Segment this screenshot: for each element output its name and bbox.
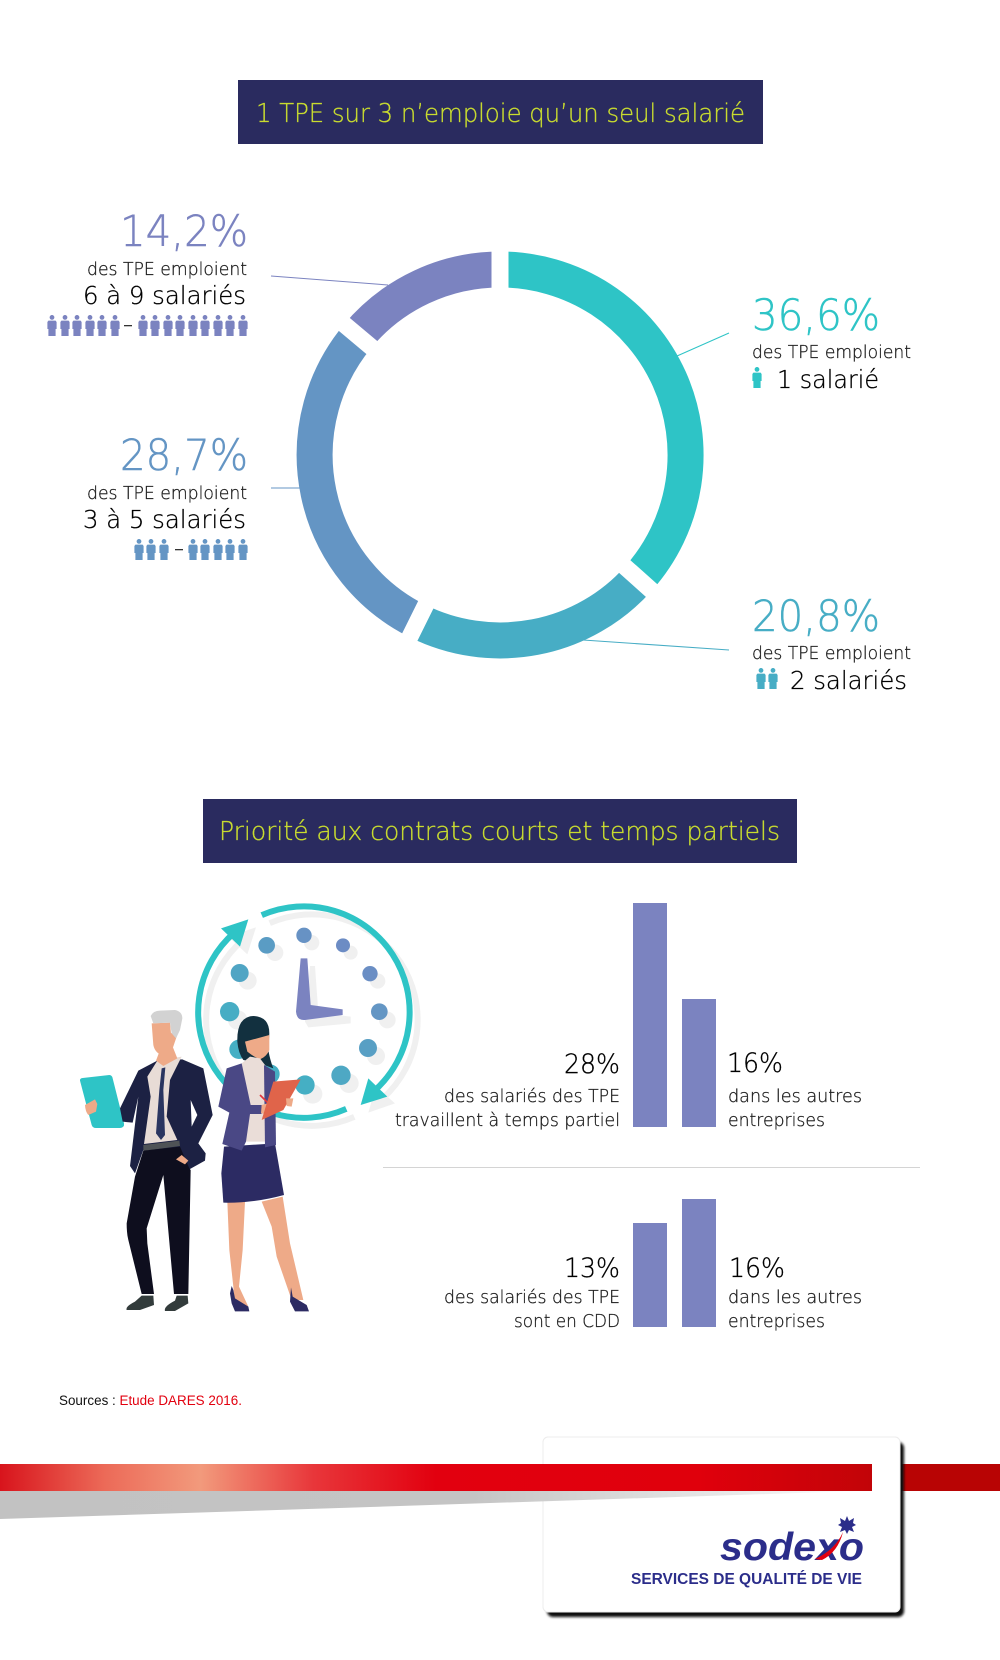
footer band and card (0, 1437, 1000, 1617)
heading: contrats courts (203, 799, 797, 863)
icon: people 6 to 9 (47, 315, 248, 336)
text: CDD autres: 16% (729, 1253, 785, 1284)
text: temps partiel TPE (395, 1049, 620, 1131)
heading: 1 TPE sur 3: 1 TPE sur 3 n’emploie qu’un seul salarié (256, 99, 745, 129)
label: 14,2%: 6 à 9 salariés (83, 281, 246, 310)
clock ring with arrows (198, 906, 410, 1118)
text: temps partiel autres (727, 1048, 862, 1131)
text: temps partiel autres: 16% (727, 1048, 783, 1079)
heading: 1 TPE sur 3 (238, 80, 763, 144)
man (80, 1010, 213, 1311)
clock hands (296, 958, 343, 1020)
bar chart: CDD (633, 1199, 716, 1327)
label: 28,7%: 3 à 5 salariés (83, 505, 246, 534)
donut chart (314, 235, 686, 675)
bar chart: temps partiel (633, 903, 716, 1127)
label: 28,7% (83, 431, 248, 560)
icon: two people (756, 668, 778, 689)
label: 14,2%: des TPE emploient (87, 259, 247, 280)
label: 14,2% (47, 207, 248, 336)
text: CDD TPE: des salariés des TPE (444, 1287, 620, 1308)
icon: people 3 to 5 (134, 539, 248, 560)
label: 28,7%: des TPE emploient (87, 483, 247, 504)
label: 20,8%: 2 salariés (790, 666, 907, 695)
text: temps partiel TPE: travaillent à temps partiel (395, 1110, 620, 1131)
clock dots (220, 928, 388, 1095)
icon: one person (752, 367, 762, 388)
text: CDD autres (728, 1253, 862, 1332)
heading: contrats courts: Priorité aux contrats courts et temps partiels (219, 817, 780, 847)
text: temps partiel TPE: 28% (564, 1049, 620, 1080)
logo: sodexo: sodexo (720, 1526, 864, 1569)
label: 36,6%: 1 salarié (777, 365, 879, 394)
logo: sodexo (631, 1516, 864, 1588)
text: temps partiel autres: dans les autres (728, 1086, 862, 1107)
illustration: clock and two people (80, 906, 418, 1311)
label: 20,8% (752, 592, 911, 695)
text: temps partiel TPE: des salariés des TPE (444, 1086, 620, 1107)
logo star (838, 1516, 856, 1534)
label: 20,8%: 20,8% (752, 592, 880, 642)
label: 36,6% (752, 291, 911, 394)
label: 28,7%: 28,7% (120, 431, 248, 481)
logo swoosh (815, 1532, 843, 1560)
label: 20,8%: des TPE emploient (752, 643, 911, 664)
text: CDD autres: dans les autres (728, 1287, 862, 1308)
text: CDD TPE (444, 1253, 620, 1332)
label: 36,6%: 36,6% (752, 291, 880, 341)
logo tagline: SERVICES DE QUALITÉ DE VIE (631, 1569, 862, 1588)
label: 14,2%: 14,2% (120, 207, 248, 257)
leader lines (271, 276, 729, 650)
label: 36,6%: des TPE emploient (752, 342, 911, 363)
clock shadow (206, 914, 418, 1126)
text: CDD autres: entreprises (728, 1311, 825, 1332)
sources: Sources : Etude DARES 2016. (59, 1393, 242, 1408)
text: CDD TPE: 13% (564, 1253, 620, 1284)
woman (218, 1016, 309, 1311)
text: CDD TPE: sont en CDD (514, 1311, 620, 1332)
text: temps partiel autres: entreprises (728, 1110, 825, 1131)
